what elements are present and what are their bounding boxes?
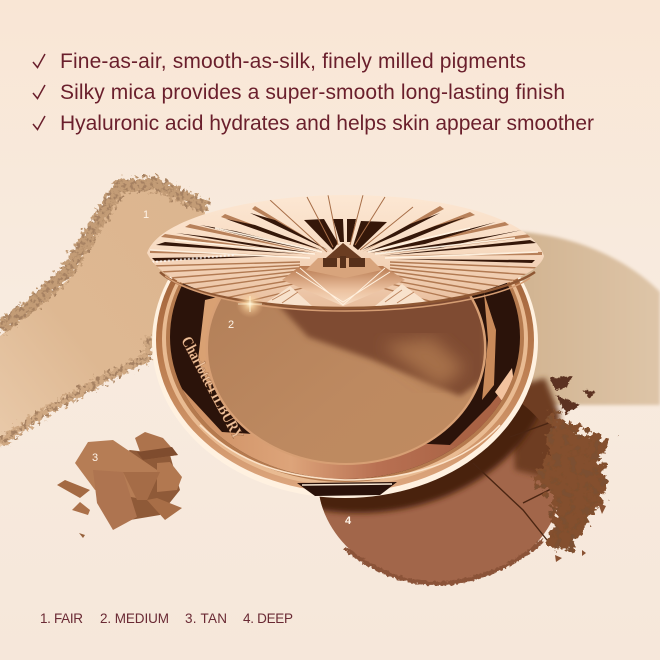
shade legend	[40, 611, 293, 626]
swatch 4: deep pressed disc with crumbs	[320, 374, 619, 586]
swatch 1: fair powder smear	[0, 183, 208, 447]
benefits list: Silky mica provides a super-smooth long-lasting finish	[60, 81, 565, 104]
shade legend: 1. FAIR	[40, 611, 83, 626]
lid sunburst rays	[150, 206, 542, 256]
bottom band	[182, 293, 513, 479]
benefits list: Hyaluronic acid hydrates and helps skin appear smoother	[60, 112, 594, 135]
compact: powder pan (shade 2)	[208, 296, 486, 465]
compact shadow on background	[490, 232, 660, 405]
benefits list	[33, 50, 594, 135]
label 3: 3	[92, 452, 98, 464]
shade legend: 2. MEDIUM	[100, 611, 169, 626]
check icon 2	[33, 85, 45, 98]
lid edge	[160, 272, 535, 308]
label 4: 4	[345, 515, 352, 527]
sparkle highlight	[236, 290, 264, 318]
brand lettering: CharlotteTILBURY	[177, 334, 246, 443]
compact: open base	[152, 276, 538, 498]
check icon 3	[33, 116, 45, 130]
lid centre emblem	[282, 266, 405, 306]
swatch 3: tan broken pieces	[57, 432, 182, 538]
compact: lid	[147, 195, 544, 311]
benefits list: Fine-as-air, smooth-as-silk, finely milled pigments	[60, 50, 526, 73]
label 1: 1	[143, 209, 149, 221]
shade legend: 3. TAN	[185, 611, 227, 626]
label 2: 2	[228, 319, 234, 331]
shade legend: 4. DEEP	[243, 611, 293, 626]
check icon 1	[33, 54, 45, 68]
